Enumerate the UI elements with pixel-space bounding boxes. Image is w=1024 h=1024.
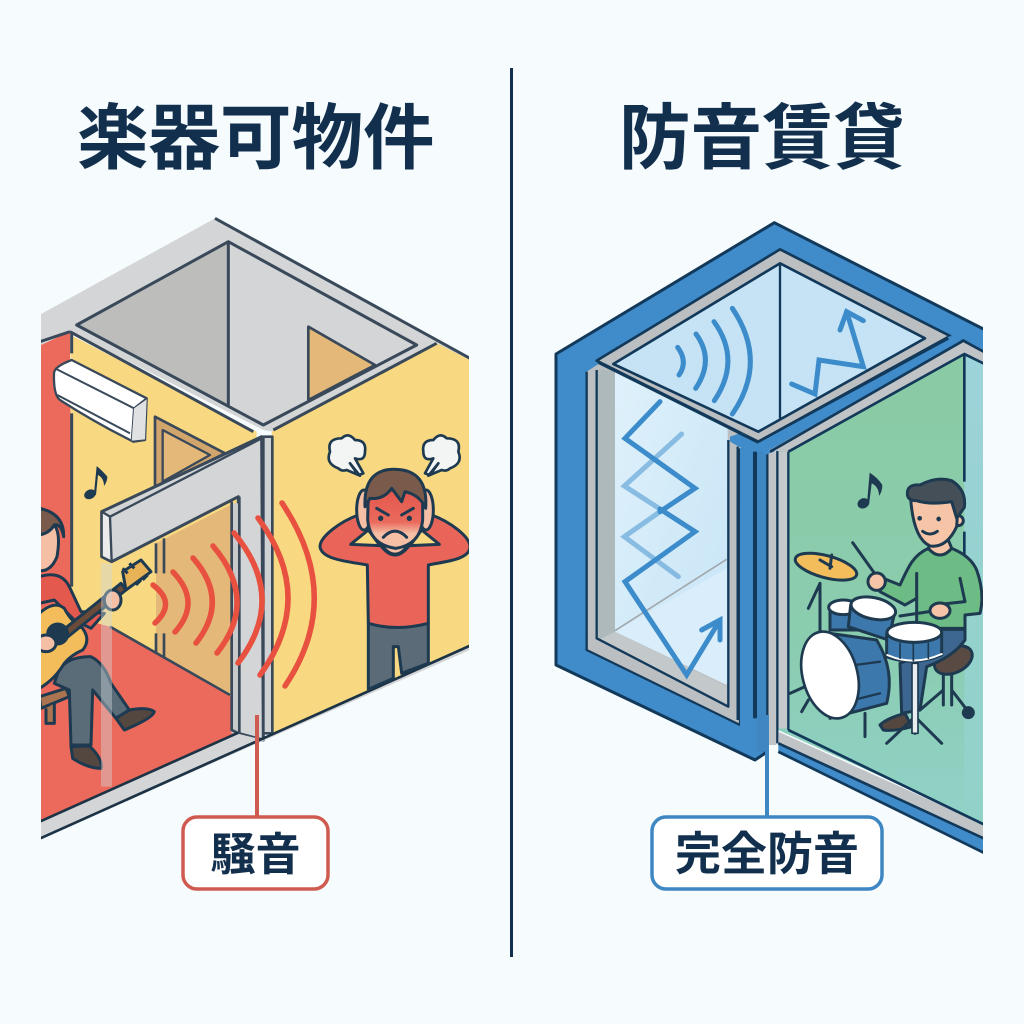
drum stand xyxy=(887,660,942,743)
hands xyxy=(104,590,121,610)
ear xyxy=(953,516,963,526)
neck xyxy=(382,535,408,554)
guitarist xyxy=(36,508,154,787)
ceiling arcs xyxy=(678,308,750,414)
yellow right wall xyxy=(272,343,470,735)
door xyxy=(156,503,233,695)
face xyxy=(368,490,423,548)
ceiling glass xyxy=(613,263,925,432)
guitar neck xyxy=(61,583,126,638)
roof edges xyxy=(30,218,470,587)
beam and pillar xyxy=(102,437,263,740)
green wall frame xyxy=(768,341,987,452)
upper door xyxy=(308,327,375,400)
door frame xyxy=(231,503,239,733)
corner blue patch xyxy=(730,433,765,455)
callout line: soundproof xyxy=(765,715,769,818)
beam side xyxy=(102,512,112,562)
guitar sound hole xyxy=(48,624,68,644)
pants xyxy=(900,629,965,713)
icon: air conditioner xyxy=(54,360,147,442)
hands xyxy=(868,573,885,590)
room structure xyxy=(30,218,470,843)
green wall xyxy=(778,343,985,823)
glass post xyxy=(101,563,112,787)
ceiling band xyxy=(30,218,470,432)
ceiling opening right xyxy=(228,242,417,425)
hair xyxy=(907,479,965,518)
pillar strip xyxy=(263,437,272,733)
icon: music note xyxy=(83,466,107,501)
callout: 騒音 xyxy=(183,817,328,889)
frame lines xyxy=(587,363,758,725)
face features xyxy=(377,508,413,537)
callout line: noise xyxy=(255,715,259,818)
title: 防音賃貸: 防音賃貸 xyxy=(619,99,905,179)
bass drum body xyxy=(830,633,889,718)
arm gaps xyxy=(351,530,380,546)
cymbal stand xyxy=(808,583,865,737)
anger puffs xyxy=(329,435,460,476)
center divider xyxy=(510,68,513,957)
eyes and smile xyxy=(917,516,922,521)
right teal strip xyxy=(964,353,985,825)
red side wall xyxy=(41,333,70,610)
bass drum head xyxy=(792,625,868,725)
headstock xyxy=(123,560,151,590)
bench xyxy=(39,688,69,708)
window sill xyxy=(598,632,727,703)
hair xyxy=(39,508,64,537)
callout: 完全防音: 完全防音 xyxy=(675,828,859,880)
room structure xyxy=(556,223,987,853)
hands xyxy=(357,490,371,530)
yellow back wall xyxy=(71,335,257,710)
glass floor xyxy=(615,568,727,685)
icon: music note xyxy=(856,473,882,510)
floor edge lines xyxy=(30,646,470,843)
annoyed neighbour xyxy=(320,469,470,689)
center column xyxy=(740,448,753,748)
hair xyxy=(365,469,426,508)
callout: 完全防音 xyxy=(652,817,882,889)
pants xyxy=(368,623,428,689)
shoe xyxy=(880,713,912,730)
opening outline xyxy=(77,242,417,425)
corridor door panel xyxy=(163,430,210,482)
face xyxy=(911,492,957,546)
stool xyxy=(790,667,968,712)
ceiling front band xyxy=(758,336,987,455)
sound waves xyxy=(153,503,314,686)
arm lines xyxy=(917,573,965,604)
left window reveal xyxy=(598,369,615,640)
guitar body xyxy=(39,605,87,688)
ceiling frame xyxy=(597,249,950,442)
sticks xyxy=(853,543,940,616)
sweater xyxy=(320,515,470,627)
sweater xyxy=(39,575,104,628)
door edge lines xyxy=(110,538,230,695)
callout: 騒音: 騒音 xyxy=(210,829,301,880)
main zigzags xyxy=(625,402,695,512)
neck xyxy=(928,540,952,555)
faded zigzags xyxy=(624,434,682,577)
floor band xyxy=(30,645,470,843)
left glass xyxy=(615,371,728,683)
drummer and drums xyxy=(790,479,982,743)
face xyxy=(39,525,58,571)
panel: soundproof room xyxy=(556,223,987,853)
panel: noisy instrument-friendly room xyxy=(30,218,470,843)
corridor door top xyxy=(155,417,225,488)
ceiling opening left xyxy=(77,242,228,405)
rack tom xyxy=(848,605,895,640)
bouncing sound arrows xyxy=(624,402,720,675)
left window frame xyxy=(587,364,758,725)
blue shell xyxy=(556,223,987,760)
shoes xyxy=(116,709,154,730)
rear tom xyxy=(830,601,860,630)
red floor xyxy=(41,623,234,820)
title: 楽器可物件: 楽器可物件 xyxy=(77,99,435,179)
cymbal xyxy=(793,548,859,585)
sweater xyxy=(880,548,982,628)
snare xyxy=(887,633,942,661)
ceiling arrow xyxy=(792,312,863,394)
bottom right bands xyxy=(778,732,985,840)
legs xyxy=(54,657,129,745)
